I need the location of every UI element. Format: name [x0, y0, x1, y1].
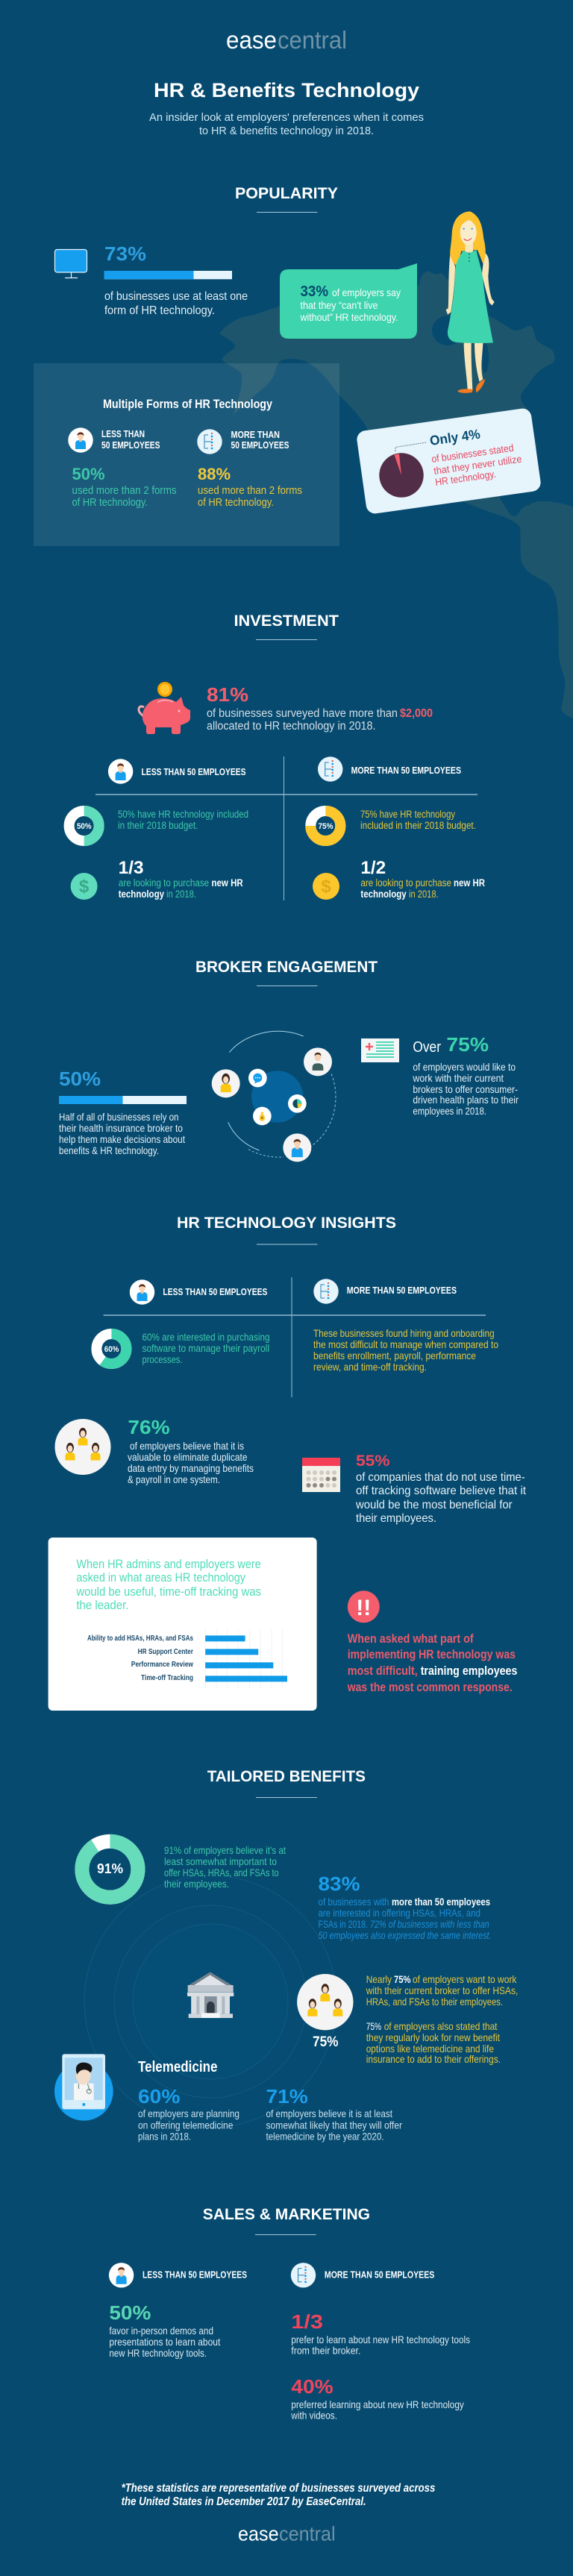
icon: three employees [55, 1419, 110, 1475]
heading: popularity [235, 185, 338, 212]
stat: 76 percent: & payroll in one system. [128, 1473, 220, 1485]
footer logo: ease [238, 2523, 279, 2545]
stat: 60 percent: 60% [138, 2085, 180, 2108]
bar chart: Ability to add HSAs, HRAs, and FSAs [87, 1634, 193, 1643]
donut chart: 60 percent: 60% [104, 1345, 119, 1354]
stat: over 75 percent: 75% [446, 1033, 489, 1056]
column: less than 50 employees: new HR technology tools. [109, 2347, 207, 2359]
card: only 4 percent [356, 407, 542, 515]
stat: 71 percent: of employers believe it is at least [266, 2108, 392, 2119]
text: broker benefits: Nearly [366, 1973, 392, 1985]
stat: 83 percent: are interested in offering HSAs, HRAs, and [318, 1907, 480, 1919]
label: less than 50: LESS THAN 50 EMPLOYEES [163, 1286, 268, 1297]
text: 75 percent budget [360, 809, 476, 831]
stat: one half: 1/2 [360, 858, 386, 878]
panel: useful areas: asked in what areas HR technology [76, 1571, 246, 1585]
callout: training employees: training employees [421, 1664, 517, 1678]
stat: over 75 percent: of employers would like to [413, 1061, 516, 1073]
panel: useful areas: When HR admins and employers were [76, 1558, 261, 1571]
icon: exclamation [348, 1591, 380, 1623]
stat: one half [360, 858, 485, 900]
stat: 55 percent: 55% [356, 1452, 390, 1470]
stat: one half: in 2018. [409, 889, 439, 900]
text: 91 percent: their employees. [164, 1878, 229, 1890]
text: payroll: software to manage their payroll [142, 1342, 269, 1354]
stat: 50 percent broker: help them make decisions about [59, 1133, 185, 1145]
stat: 83 percent: 50 employees also expressed the same interest. [318, 1929, 491, 1941]
icon: yellow dollar: $ [321, 877, 331, 897]
speech bubble: 33 percent: without” HR technology. [300, 311, 398, 323]
column: more than 50 employees: 1/3 [291, 2310, 323, 2333]
text: broker benefits: of employers want to work [413, 1973, 517, 1985]
callout: training employees: was the most common response. [347, 1681, 513, 1694]
text: payroll: processes. [142, 1353, 182, 1365]
column: more than 50 employees: MORE THAN 50 EMPLOYEES [325, 2269, 435, 2281]
stat: 83 percent: 83% [318, 1873, 360, 1895]
icon: bank building [187, 1972, 234, 2018]
stat: one third: in 2018. [166, 889, 196, 900]
donut chart: 75 percent: 75% [318, 822, 334, 831]
donut chart: 60 percent [96, 1334, 126, 1364]
speech bubble: 33 percent: 33% [300, 283, 328, 300]
text: broker benefits: they regularly look for new benefit [366, 2031, 500, 2043]
label: less than 50: LESS THAN 50 EMPLOYEES [142, 766, 246, 777]
card: only 4 percent: HR technology. [434, 468, 497, 488]
icon: piggy bank [139, 682, 190, 734]
text: broker benefits [366, 1973, 518, 2065]
column: more than 50 employees: prefer to learn about new HR technology tools [291, 2334, 470, 2345]
stat: 60 percent: plans in 2018. [138, 2131, 191, 2143]
stat: 55 percent [355, 1452, 527, 1525]
logo [226, 26, 347, 54]
card: only 4 percent: of businesses stated [430, 442, 514, 465]
stat: 73 percent: 73% [104, 242, 146, 265]
stat: over 75 percent: employees in 2018. [413, 1105, 486, 1117]
stat: over 75 percent: driven health plans to their [413, 1094, 519, 1106]
heading: popularity: POPULARITY [235, 185, 338, 202]
icon: pie chart [288, 1094, 307, 1113]
stat: one third: technology [119, 889, 164, 900]
stat: 71 percent: somewhat likely that they will offer [266, 2119, 402, 2131]
icon: medical document [361, 1038, 399, 1062]
stat: 50 percent: 50% [72, 465, 104, 483]
subtitle: to HR & benefits technology in 2018. [199, 125, 374, 137]
text: broker benefits: of employers also stated that [384, 2020, 498, 2032]
icon: teal dollar [71, 873, 98, 900]
stat: 60 percent: on offering telemedicine [138, 2119, 234, 2131]
stat: 71 percent: telemedicine by the year 2020. [266, 2131, 383, 2143]
label: more than 50: 50 EMPLOYEES [231, 439, 289, 451]
stat: 76 percent: valuable to eliminate duplicate [128, 1451, 248, 1463]
label: 75 percent: 75% [313, 2034, 339, 2050]
footnote: *These statistics are representative of businesses surveyed across [122, 2482, 435, 2495]
text: 75 percent budget: 75% have HR technology [360, 809, 455, 820]
footer logo: central [279, 2523, 336, 2545]
panel: useful areas: the leader. [76, 1599, 128, 1612]
text: payroll [142, 1331, 270, 1365]
donut chart: 75 percent [310, 811, 340, 841]
column: less than 50 employees: favor in-person demos and [109, 2325, 213, 2337]
icon: chat bubble [248, 1069, 267, 1087]
bar chart: Time-off Tracking [141, 1673, 193, 1682]
stat: 88 percent: 88% [198, 465, 231, 483]
icon: money bag [253, 1107, 272, 1125]
stat: over 75 percent: Over [413, 1039, 441, 1056]
stat: 88 percent [198, 465, 302, 509]
heading: sales and marketing: SALES & MARKETING [203, 2206, 370, 2223]
stat: 81 percent: 81% [207, 683, 248, 706]
stat: 55 percent: would be the most beneficial for [355, 1499, 513, 1511]
stat: one half: new HR [454, 877, 485, 889]
stat: 76 percent: of employers believe that it is [130, 1440, 244, 1452]
panel: useful areas [48, 1538, 317, 1711]
label: more than 50: MORE THAN 50 EMPLOYEES [347, 1285, 457, 1296]
callout: training employees: When asked what part of [348, 1632, 474, 1646]
text: onboarding [313, 1327, 498, 1373]
panel: multiple forms [34, 363, 339, 546]
icon: employee [283, 1133, 311, 1162]
icon: large business [318, 756, 342, 782]
panel: useful areas: would be useful, time-off tracking was [75, 1585, 261, 1599]
stat: 73 percent: form of HR technology. [104, 304, 215, 317]
text: 50 percent budget: in their 2018 budget. [118, 820, 198, 831]
stat: 50 percent broker: their health insurance broker to [59, 1122, 183, 1134]
panel: multiple forms: Multiple Forms of HR Technology [103, 398, 273, 411]
stat: over 75 percent: brokers to offer consumer- [413, 1083, 518, 1095]
stat: 50 percent: of HR technology. [72, 497, 148, 509]
stat: 81 percent: of businesses surveyed have more than [207, 707, 398, 720]
callout: training employees [347, 1591, 517, 1694]
stat: 50 percent broker [59, 1068, 187, 1156]
text: 91 percent: offer HSAs, HRAs, and FSAs to [164, 1867, 279, 1878]
stat: 76 percent: data entry by managing benefits [128, 1462, 254, 1474]
icon: calendar [302, 1458, 340, 1492]
stat: 50 percent [72, 465, 176, 509]
text: broker benefits: 75% [394, 1973, 411, 1985]
stat: 71 percent: 71% [266, 2085, 308, 2108]
stat: 71 percent [266, 2085, 402, 2143]
stat: 81 percent: allocated to HR technology in 2018. [207, 720, 376, 733]
icon: large business [197, 429, 222, 454]
stat: one third: new HR [212, 877, 243, 889]
pie chart: 4 percent [379, 453, 424, 498]
callout: training employees: implementing HR technology was [348, 1648, 516, 1661]
stat: one third: 1/3 [119, 858, 143, 878]
stat: over 75 percent [413, 1033, 519, 1117]
text: broker benefits: 75% [366, 2020, 381, 2032]
stat: 55 percent: of companies that do not use time- [356, 1471, 525, 1484]
icon: small business [108, 759, 133, 784]
card: only 4 percent: Only 4% [429, 427, 481, 448]
stat: 88 percent: of HR technology. [198, 497, 274, 509]
icon: yellow dollar [313, 873, 339, 900]
speech bubble: 33 percent [280, 263, 417, 339]
stat: 81 percent [207, 683, 433, 733]
stat: 73 percent [55, 242, 248, 317]
decorative rings with building [84, 1875, 336, 2128]
label: more than 50: MORE THAN [231, 429, 280, 440]
text: 50 percent budget: 50% have HR technology included [118, 809, 248, 820]
column: less than 50 employees: LESS THAN 50 EMPLOYEES [143, 2269, 247, 2281]
stat: 83 percent: of businesses with [318, 1896, 389, 1908]
icon: small business [68, 427, 93, 453]
donut chart: 50 percent: 50% [77, 822, 92, 831]
donut chart: 91 percent: 91% [97, 1861, 123, 1876]
stat: 60 percent [138, 2085, 239, 2143]
label: less than 50 [101, 428, 160, 451]
stat: one half: are looking to purchase [360, 877, 451, 889]
text: onboarding: benefits enrollment, payroll, performance [313, 1350, 476, 1361]
text: 91 percent: least somewhat important to [164, 1855, 277, 1867]
heading: tailored benefits: TAILORED BENEFITS [207, 1768, 366, 1785]
speech bubble: 33 percent: that they “can't live [300, 299, 378, 311]
text: broker benefits: insurance to add to their offerings. [366, 2053, 501, 2065]
bar chart [87, 1629, 287, 1688]
text: 50 percent budget [118, 809, 248, 831]
card: only 4 percent: that they never utilize [433, 454, 522, 477]
icon: monitor [55, 249, 87, 278]
heading: investment: INVESTMENT [234, 612, 339, 630]
stat: one third [119, 858, 243, 900]
footnote: the United States in December 2017 by EaseCentral. [122, 2495, 366, 2508]
column: more than 50 employees [290, 2263, 470, 2422]
text: onboarding: review, and time-off tracking. [313, 1361, 427, 1373]
comparison table: investment [69, 756, 485, 900]
icon: large business [291, 2263, 316, 2287]
stat: 76 percent: 76% [128, 1416, 170, 1438]
background map silhouette [219, 272, 573, 718]
stat: one third: are looking to purchase [119, 877, 209, 889]
donut chart: 91 percent [82, 1841, 138, 1897]
column: less than 50 employees [109, 2263, 247, 2359]
text: broker benefits: with their current broker to offer HSAs, [366, 1984, 518, 1996]
label: more than 50 [231, 429, 289, 451]
subtitle: An insider look at employers' preferences when it comes [149, 111, 424, 124]
text: 91 percent [164, 1844, 286, 1890]
label: less than 50: LESS THAN [101, 428, 145, 439]
text: broker benefits: HRAs, and FSAs to their employees. [366, 1996, 503, 2008]
stat: 50 percent broker: benefits & HR technology. [59, 1144, 159, 1156]
icon: teal dollar: $ [79, 877, 90, 897]
comparison table: insights [96, 1277, 498, 1397]
label: less than 50: 50 EMPLOYEES [101, 439, 160, 451]
text: onboarding: These businesses found hiring and onboarding [313, 1327, 495, 1339]
stat: 50 percent broker: 50% [59, 1068, 101, 1090]
column: less than 50 employees: presentations to learn about [109, 2336, 220, 2348]
icon: small business [130, 1279, 154, 1305]
stat: 55 percent: their employees. [356, 1512, 436, 1525]
text: payroll: 60% are interested in purchasing [142, 1331, 270, 1343]
callout: training employees: most difficult, [348, 1664, 418, 1678]
text: onboarding: the most difficult to manage when compared to [313, 1338, 498, 1350]
logo: central [278, 26, 347, 54]
title: HR & Benefits Technology [154, 79, 419, 101]
footnote [122, 2482, 435, 2508]
icon: large business [313, 1279, 339, 1304]
icon: telemedicine doctor [54, 2054, 113, 2121]
logo: ease [226, 26, 277, 54]
icon: exclamation: !! [356, 1596, 371, 1620]
text: 75 percent budget: included in their 2018 budget. [360, 820, 476, 831]
icon: small business [109, 2263, 134, 2287]
diagram: broker network [212, 1031, 336, 1162]
footer logo [238, 2523, 336, 2545]
column: more than 50 employees: with videos. [290, 2410, 337, 2422]
label: more than 50: MORE THAN 50 EMPLOYEES [351, 765, 461, 776]
icon: employees 75 percent [297, 1974, 354, 2030]
stat: 83 percent: FSAs in 2018. [318, 1918, 368, 1930]
stat: over 75 percent: work with their current [413, 1072, 504, 1084]
stat: 55 percent: off tracking software believe that it [356, 1485, 527, 1497]
stat: 83 percent: more than 50 employees [392, 1896, 490, 1908]
column: less than 50 employees: 50% [109, 2301, 151, 2324]
subtitle [149, 111, 424, 137]
heading: telemedicine: Telemedicine [138, 2059, 217, 2075]
column: more than 50 employees: preferred learning about new HR technology [291, 2398, 464, 2410]
stat: 88 percent: used more than 2 forms [198, 485, 302, 497]
text: 91 percent: 91% of employers believe it’s at [164, 1844, 286, 1856]
icon: broker woman [212, 1069, 240, 1097]
heading: broker engagement: BROKER ENGAGEMENT [195, 959, 378, 976]
stat: 81 percent: $2,000 [400, 707, 433, 720]
illustration: woman [446, 211, 495, 393]
text: broker benefits: options like telemedicine and life [366, 2043, 494, 2055]
stat: 50 percent broker: Half of all of businesses rely on [59, 1111, 179, 1123]
stat: 83 percent [318, 1873, 491, 1941]
bar chart: HR Support Center [138, 1647, 193, 1656]
stat: 50 percent: used more than 2 forms [72, 485, 176, 497]
stat: 60 percent: of employers are planning [138, 2108, 239, 2119]
speech bubble: 33 percent: of employers say [332, 286, 401, 298]
column: more than 50 employees: from their broker. [291, 2345, 360, 2357]
heading: hr technology insights: HR TECHNOLOGY INSIGHTS [177, 1215, 396, 1232]
stat: 76 percent [128, 1416, 254, 1485]
bar chart: Performance Review [131, 1660, 194, 1669]
stat: 83 percent: 72% of businesses with less than [370, 1918, 489, 1930]
column: more than 50 employees: 40% [291, 2375, 334, 2398]
stat: one half: technology [360, 889, 407, 900]
stat: 73 percent: of businesses use at least one [104, 290, 248, 303]
icon: broker man [304, 1047, 332, 1076]
donut chart: 50 percent [69, 811, 99, 841]
